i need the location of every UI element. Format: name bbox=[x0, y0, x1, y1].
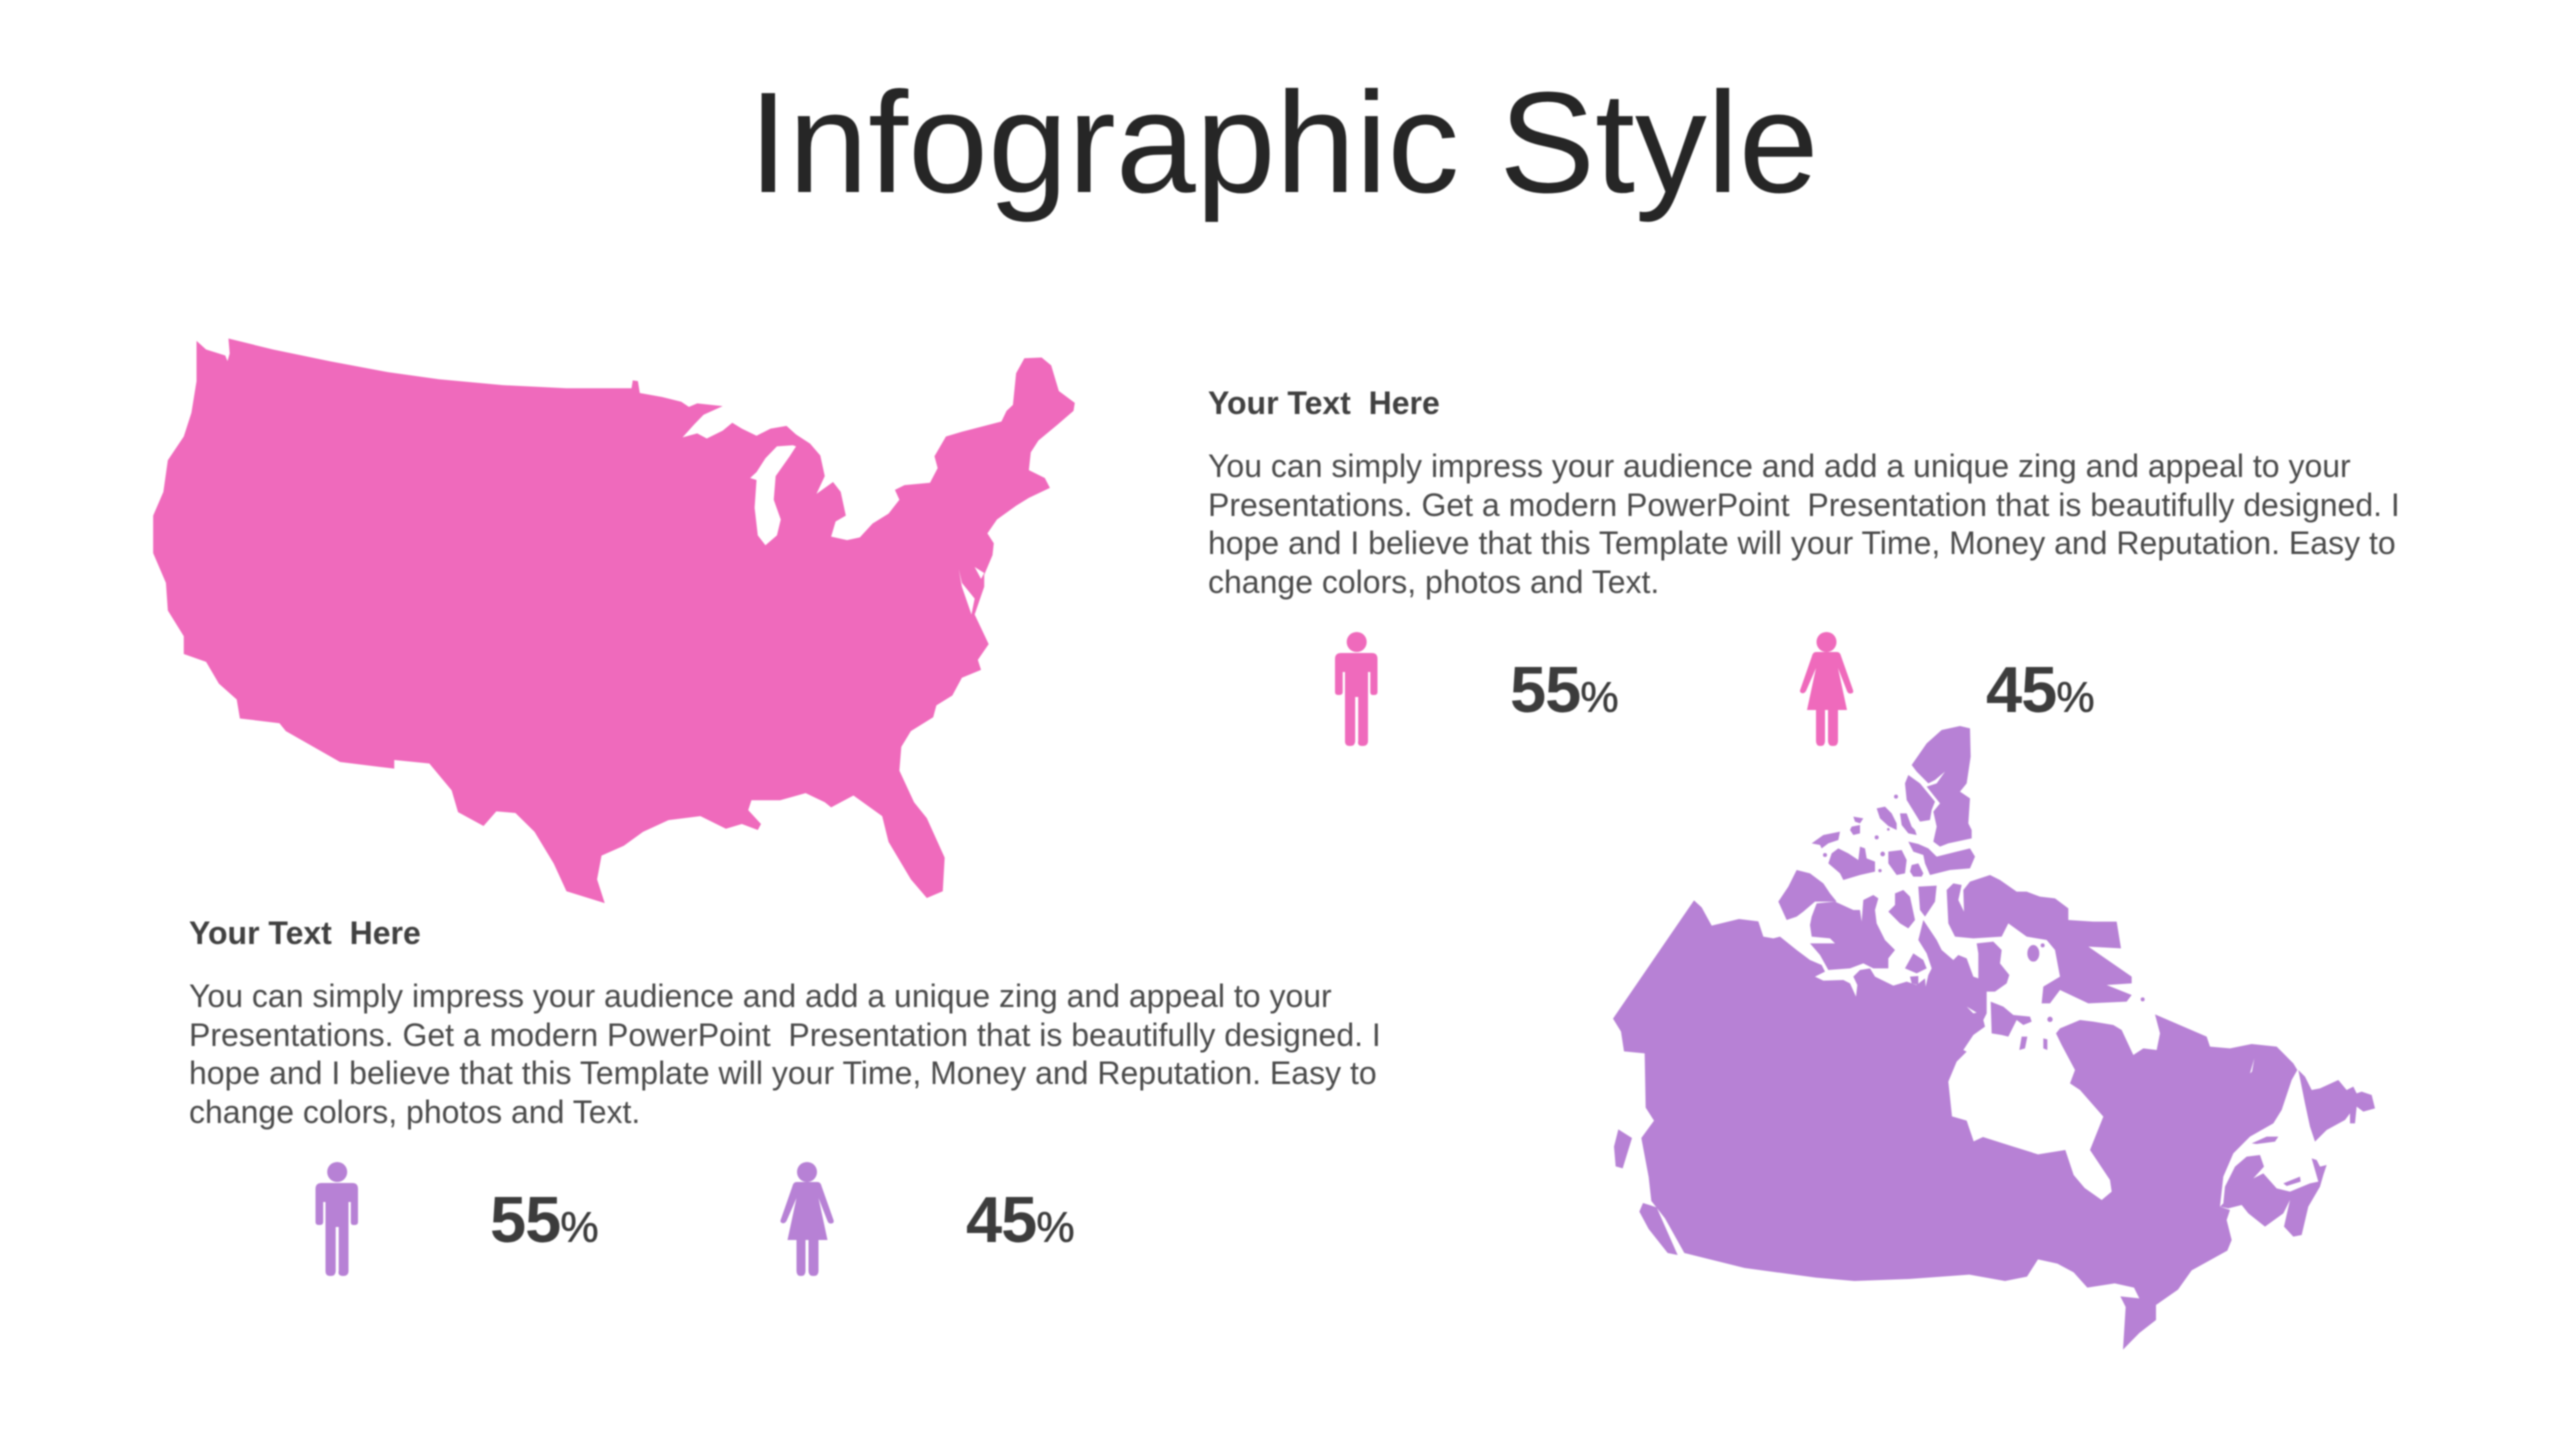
mainland bbox=[1613, 900, 2297, 1350]
west coast islands bbox=[1614, 1129, 1678, 1255]
icon: man pink bbox=[1335, 632, 1378, 746]
heading: top right: Your Text Here bbox=[1208, 385, 1440, 421]
stat: 55 percent purple: 55% bbox=[490, 1183, 599, 1256]
title: Infographic Style bbox=[748, 63, 1819, 223]
stat: 45 percent purple: 45% bbox=[966, 1183, 1075, 1256]
atlantic provinces bbox=[2220, 1070, 2375, 1237]
icon: woman pink bbox=[1800, 632, 1853, 746]
stat: 55 percent pink: 55% bbox=[1510, 653, 1619, 726]
icon: man purple bbox=[316, 1162, 358, 1276]
text block: top right: You can simply impress your audience and add a unique zing and appeal to your Presentations. Get a modern PowerPoint Presentation that is beautifully designed. I hope and I believe that this Template will your Time, Money and Reputation. Easy to change colors, photos and Text. bbox=[1208, 448, 2400, 600]
inlets bbox=[1967, 1007, 2254, 1073]
map: United States bbox=[153, 338, 1075, 903]
icon: woman purple bbox=[780, 1162, 834, 1276]
map: Canada bbox=[1613, 726, 2375, 1350]
heading: bottom left: Your Text Here bbox=[189, 915, 421, 951]
arctic islands bbox=[1778, 726, 2132, 1050]
text block: bottom left: You can simply impress your audience and add a unique zing and appeal to your Presentations. Get a modern PowerPoint Presentation that is beautifully designed. I hope and I believe that this Template will your Time, Money and Reputation. Easy to change colors, photos and Text. bbox=[189, 978, 1381, 1130]
stat: 45 percent pink: 45% bbox=[1986, 653, 2095, 726]
